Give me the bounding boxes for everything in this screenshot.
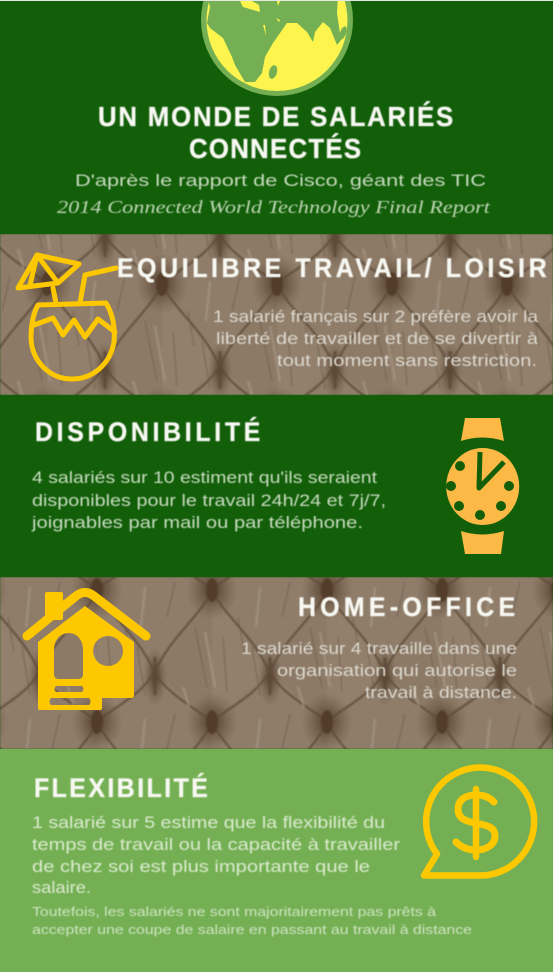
text block: 1 salarié français sur 2 préfère avoir la — [213, 307, 539, 326]
text block: joignables par mail ou par téléphone. — [31, 513, 363, 532]
heading: FLEXIBILITÉ — [34, 773, 208, 803]
text block — [32, 813, 400, 897]
panel: home-office — [0, 577, 553, 749]
text block — [31, 468, 386, 532]
text block: tout moment sans restriction. — [277, 351, 537, 370]
text block: organisation qui autorise le — [277, 661, 517, 680]
icon: coconut cocktail — [18, 255, 116, 379]
heading: DISPONIBILITÉ — [35, 417, 260, 447]
panel: disponibilité — [0, 395, 553, 577]
title: UN MONDE DE SALARIÉS — [98, 100, 453, 132]
text block: salaire. — [32, 878, 91, 897]
top edge line — [0, 0, 553, 1]
panel: flexibilité — [0, 749, 553, 972]
panel: équilibre travail / loisir — [0, 234, 553, 395]
title — [98, 100, 453, 164]
text block — [241, 639, 517, 702]
heading: EQUILIBRE TRAVAIL/ LOISIR — [117, 254, 547, 283]
text block: temps de travail ou la capacité à travailler — [32, 835, 400, 854]
text block: 1 salarié sur 4 travaille dans une — [241, 639, 517, 658]
text block — [213, 307, 539, 370]
text block: 1 salarié sur 5 estime que la flexibilité du — [32, 813, 385, 832]
title: CONNECTÉS — [189, 132, 361, 164]
icon: watch — [446, 418, 519, 554]
panel: header — [56, 1, 491, 218]
note: Toutefois, les salariés ne sont majoritairement pas prêts à — [32, 904, 437, 919]
text block: travail à distance. — [365, 683, 517, 702]
heading: HOME-OFFICE — [298, 593, 515, 622]
text block: liberté de travailler et de se divertir à — [216, 329, 539, 348]
report name: 2014 Connected World Technology Final Report — [57, 197, 491, 217]
text block: disponibles pour le travail 24h/24 et 7j/7, — [32, 491, 386, 510]
icon: globe — [201, 0, 353, 96]
note: accepter une coupe de salaire en passant au travail à distance — [32, 922, 472, 937]
text block: 4 salariés sur 10 estiment qu'ils seraient — [32, 468, 377, 487]
icon: speech bubble with dollar — [424, 768, 534, 876]
text block: de chez soi est plus importante que le — [32, 857, 370, 876]
subtitle: D'après le rapport de Cisco, géant des TIC — [75, 171, 486, 190]
note — [32, 904, 472, 937]
icon: house — [27, 592, 146, 710]
